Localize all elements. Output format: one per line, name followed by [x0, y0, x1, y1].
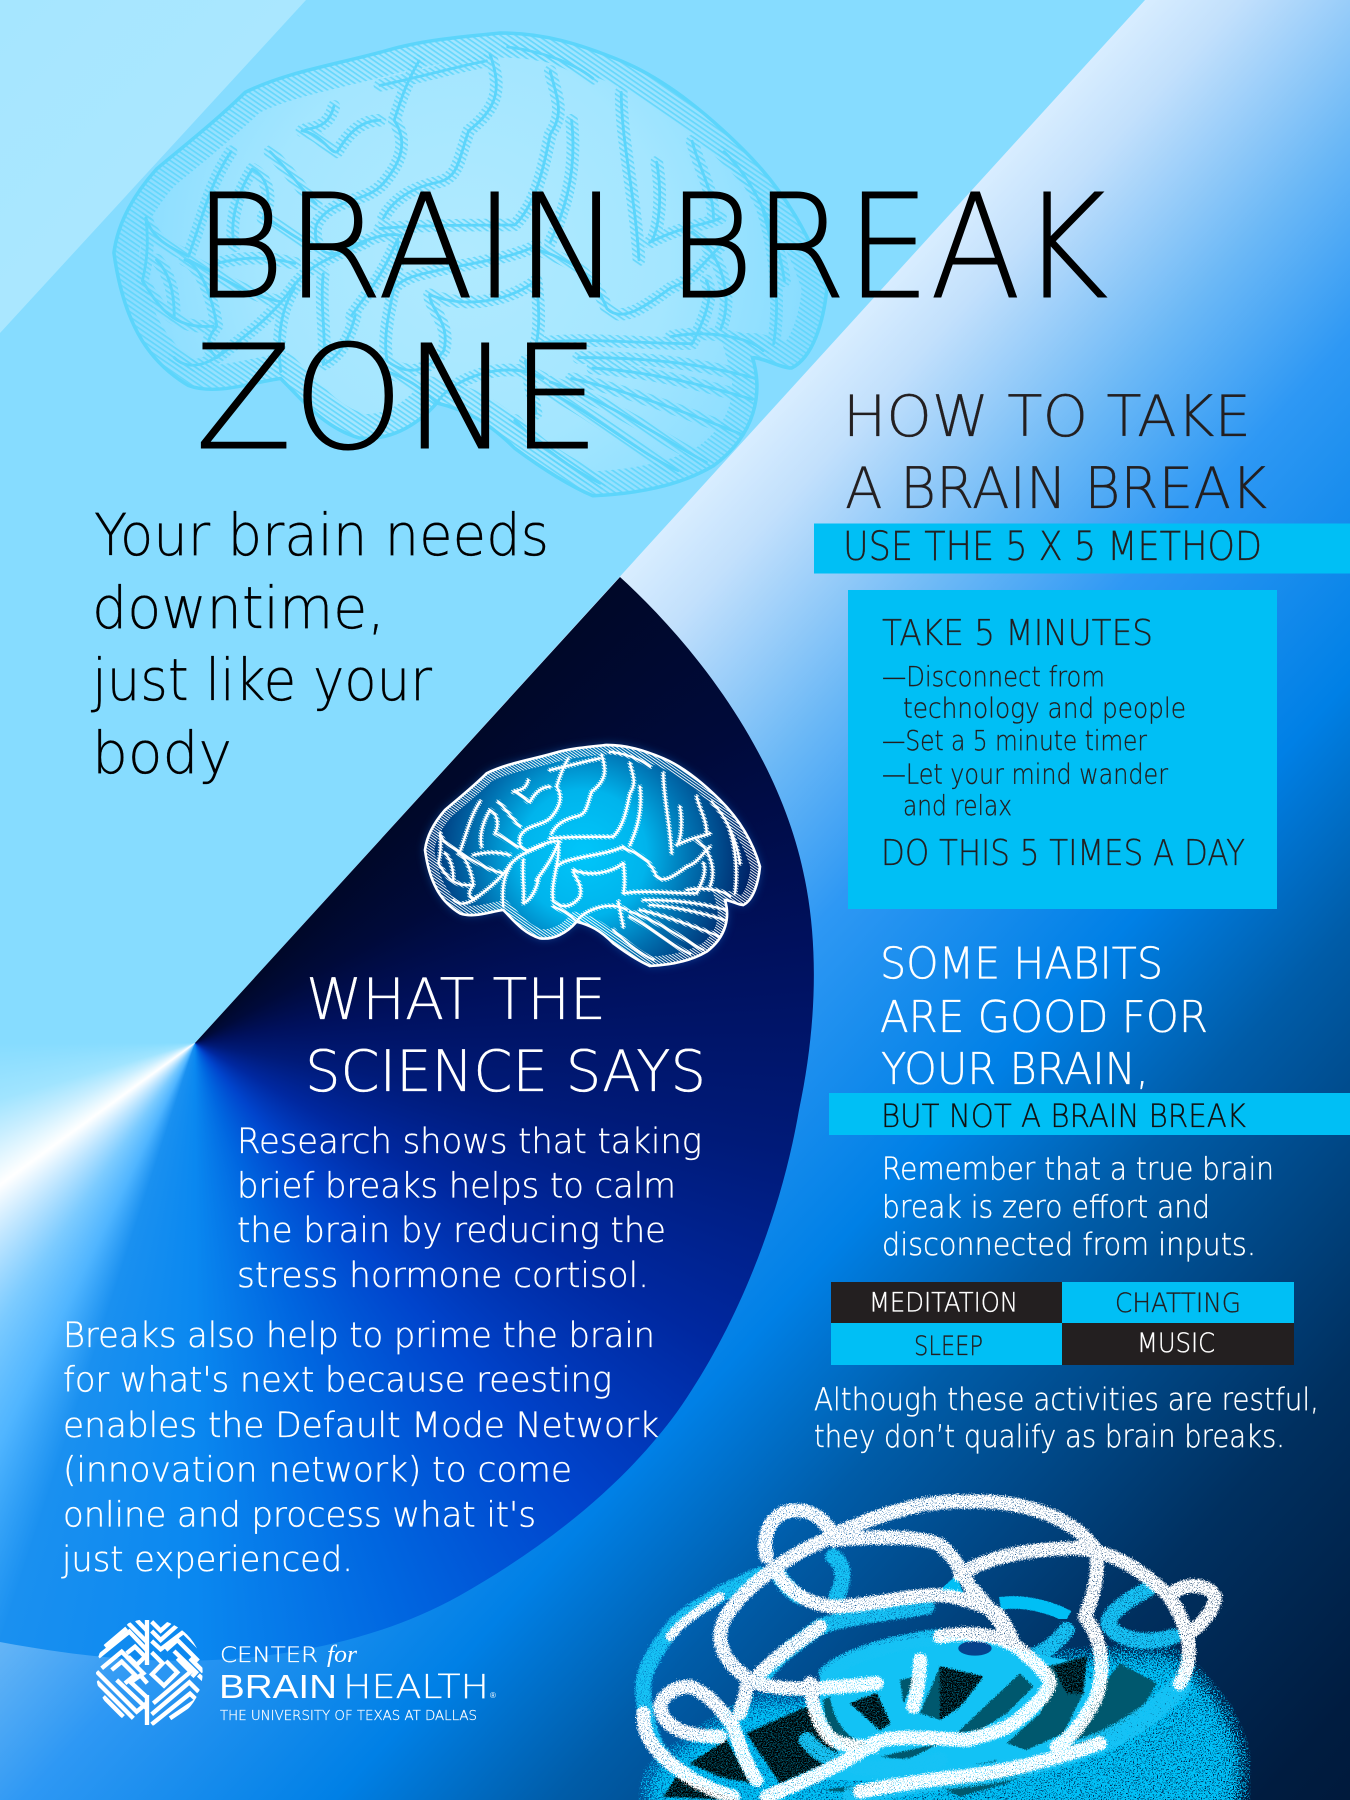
- top-left pale diagonal band: [0, 0, 306, 333]
- subtitle: Your brain needs: [94, 501, 549, 569]
- text: remember paragraph: [882, 1152, 1274, 1263]
- text: research paragraph: brief breaks helps to calm: [237, 1166, 676, 1206]
- faded engraved brain illustration: [114, 33, 827, 496]
- instructions list: —Disconnect from: [882, 660, 1105, 693]
- logo: center for brainhealth: ®: [490, 1691, 496, 1700]
- heading: some habits are good for your brain: SOME HABITS: [880, 938, 1163, 990]
- banner: but not a brain break: [829, 1093, 1350, 1135]
- instructions list: technology and people: [903, 692, 1186, 724]
- solid cyan arc: [940, 1575, 1068, 1617]
- activities grid: MUSIC: [1137, 1328, 1215, 1359]
- text: default mode network paragraph: just experienced.: [61, 1540, 353, 1580]
- text: although paragraph: [814, 1382, 1319, 1455]
- text: default mode network paragraph: [61, 1316, 659, 1580]
- heading: what the science says: SCIENCE SAYS: [305, 1039, 706, 1105]
- heading: some habits are good for your brain: [880, 938, 1208, 1095]
- activities grid: [831, 1282, 1294, 1365]
- activities grid: SLEEP: [914, 1331, 983, 1362]
- heading: how to take a brain break: HOW TO TAKE: [843, 384, 1251, 450]
- teal shadows: [663, 1657, 1157, 1800]
- heading: how to take a brain break: [843, 384, 1267, 522]
- instructions list: and relax: [903, 789, 1012, 822]
- logo: center for brainhealth: THE UNIVERSITY OF TEXAS AT DALLAS: [220, 1708, 477, 1724]
- text: default mode network paragraph: for what's next because reesting: [63, 1360, 612, 1400]
- text: default mode network paragraph: (innovation network) to come: [63, 1451, 572, 1491]
- text: remember paragraph: Remember that a true brain: [882, 1152, 1274, 1188]
- heading: some habits are good for your brain: ARE GOOD FOR: [880, 992, 1208, 1043]
- text: research paragraph: Research shows that taking: [237, 1122, 702, 1162]
- icon: maze brain circle: [97, 1620, 205, 1725]
- subtitle: body: [92, 719, 232, 787]
- heading: how to take a brain break: A BRAIN BREAK: [845, 456, 1267, 522]
- instructions list: —Set a 5 minute timer: [882, 724, 1147, 757]
- panel: take 5 minutes: [848, 590, 1277, 909]
- instructions list: —Let your mind wander: [882, 758, 1168, 790]
- heading: some habits are good for your brain: YOUR BRAIN,: [881, 1044, 1149, 1095]
- cyan grainy body: [648, 1653, 1242, 1800]
- text: remember paragraph: break is zero effort and: [882, 1190, 1210, 1226]
- cyan rope strands: [643, 1557, 1180, 1797]
- illustration: tangled scribble over cyan body: [643, 1501, 1242, 1800]
- title: BRAIN: [193, 163, 621, 331]
- text: research paragraph: stress hormone cortisol.: [237, 1256, 649, 1296]
- subtitle: just like your: [90, 646, 432, 714]
- subtitle: [90, 501, 549, 787]
- heading: what the science says: [305, 967, 706, 1105]
- logo: center for brainhealth: [97, 1620, 496, 1725]
- text: remember paragraph: disconnected from inputs.: [882, 1227, 1256, 1263]
- panel: take 5 minutes: TAKE 5 MINUTES: [882, 613, 1153, 654]
- title: BREAK: [667, 163, 1108, 331]
- logo: center for brainhealth: CENTER: [220, 1643, 318, 1667]
- instructions list: [882, 660, 1186, 822]
- text: default mode network paragraph: Breaks also help to prime the brain: [63, 1316, 655, 1356]
- light blue upper-left field: [0, 0, 1145, 1043]
- banner: use the 5 x 5 method: USE THE 5 X 5 METHOD: [843, 524, 1262, 570]
- logo: center for brainhealth: for: [327, 1642, 358, 1668]
- text: default mode network paragraph: online and process what it's: [63, 1495, 536, 1535]
- text: default mode network paragraph: enables the Default Mode Network: [63, 1406, 659, 1446]
- panel: take 5 minutes: DO THIS 5 TIMES A DAY: [881, 833, 1245, 874]
- activities grid: MEDITATION: [869, 1288, 1018, 1318]
- subtitle: downtime,: [92, 574, 385, 642]
- heading: what the science says: WHAT THE: [306, 967, 606, 1033]
- text: research paragraph: [237, 1122, 702, 1296]
- white rope strands: [643, 1501, 1215, 1797]
- title: ZONE: [195, 314, 600, 482]
- text: although paragraph: they don’t qualify as brain breaks.: [814, 1419, 1285, 1455]
- banner: but not a brain break: BUT NOT A BRAIN BREAK: [881, 1097, 1246, 1135]
- text: research paragraph: the brain by reducing the: [237, 1211, 666, 1251]
- cyan tangle centre: [820, 1637, 1100, 1780]
- logo: center for brainhealth: BRAIN: [219, 1668, 337, 1705]
- logo: center for brainhealth: HEALTH: [343, 1667, 489, 1706]
- black shadow grain: [663, 1657, 1087, 1800]
- title: [193, 163, 1108, 482]
- icon: glowing brain: [425, 745, 760, 966]
- activities grid: CHATTING: [1115, 1288, 1241, 1319]
- dark blue teardrop panel background: [0, 577, 814, 1661]
